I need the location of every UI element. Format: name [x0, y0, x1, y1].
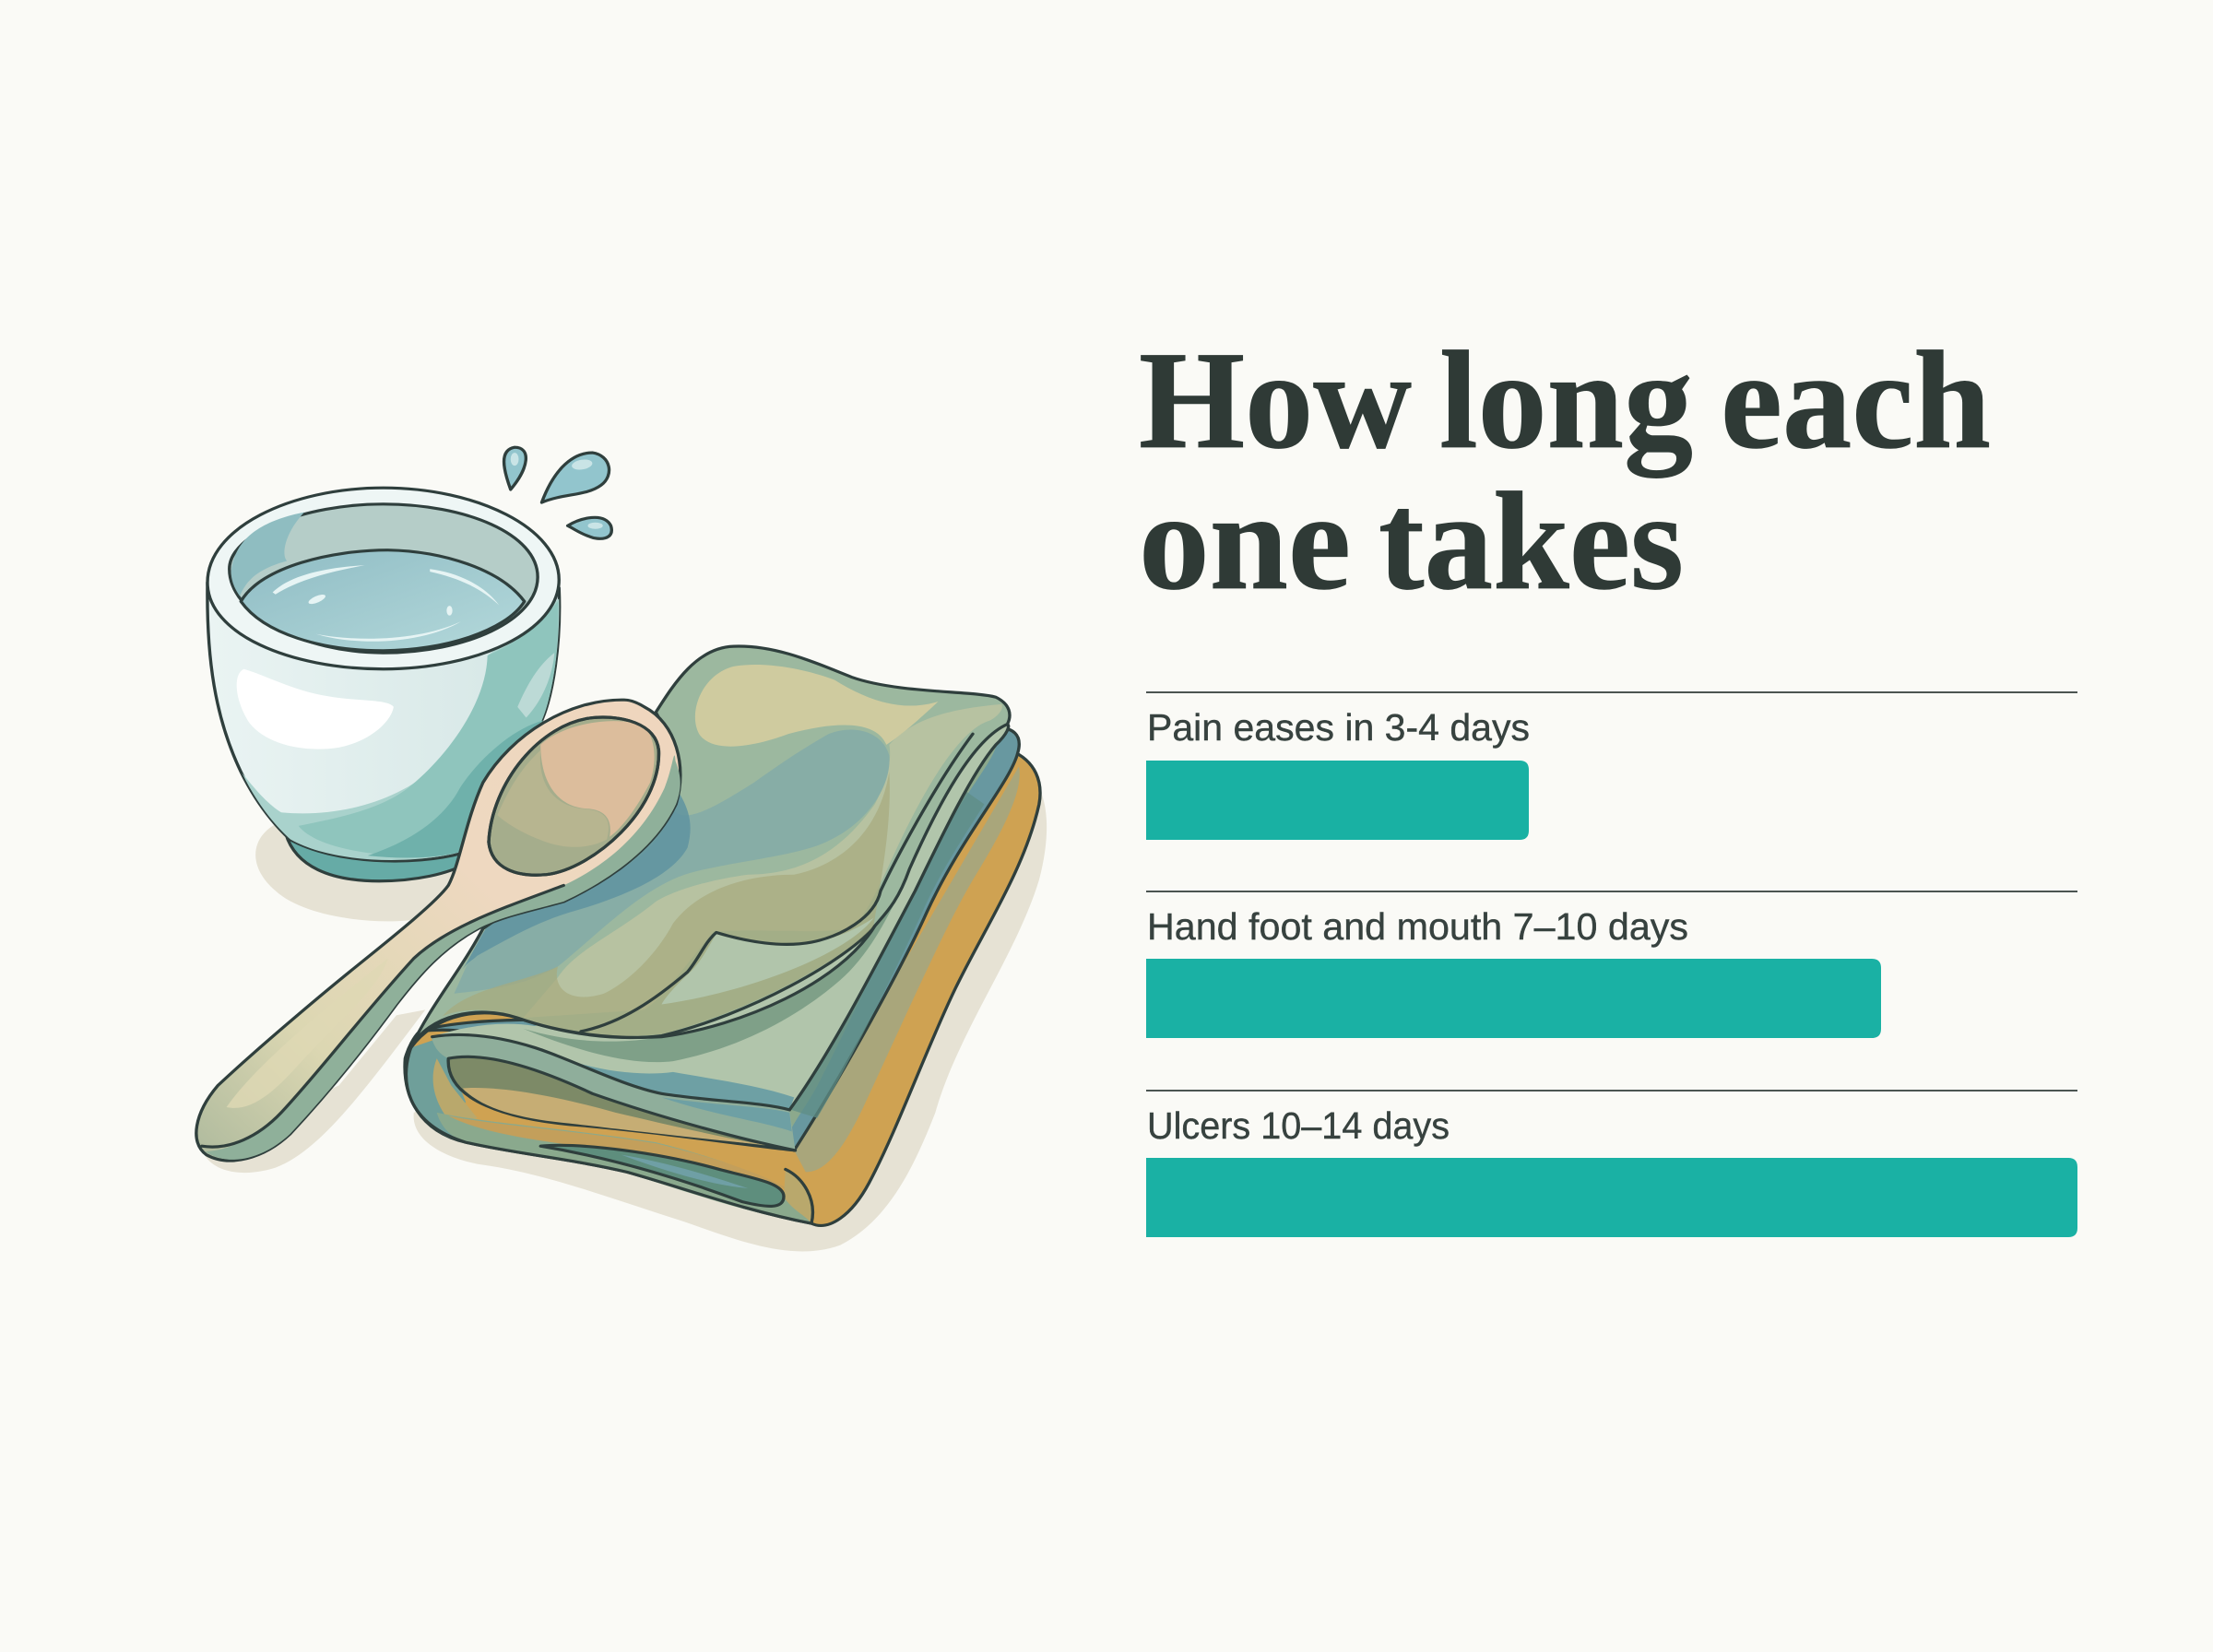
cloth colour washes [695, 665, 939, 747]
title: each [1721, 323, 1991, 478]
cloth bottom layer [405, 750, 1040, 1225]
bowl body [207, 583, 560, 861]
cloth lower roll [437, 1113, 811, 1223]
water surface [241, 550, 525, 651]
cloth fold lines [581, 734, 973, 1032]
icon: wooden spoon [196, 700, 680, 1161]
title: one [1139, 464, 1351, 619]
soft ground shadows [201, 788, 1047, 1251]
illustration: bowl of water, spoon and folded cloth [196, 447, 1047, 1251]
row: pain eases: Pain eases in 3-4 days [1147, 706, 1530, 749]
icon: water splash drops [504, 447, 611, 538]
icon: folded cloth [405, 646, 1040, 1225]
bowl shading [242, 598, 559, 860]
spoon edge lines [202, 885, 563, 1147]
title: long [1439, 323, 1693, 478]
cloth second band [432, 1034, 795, 1150]
spoon silhouette [196, 700, 680, 1161]
row: ulcers [1146, 1090, 2077, 1237]
icon: water bowl [207, 488, 560, 881]
title: takes [1379, 464, 1684, 619]
bowl foot [286, 794, 489, 881]
bar chart: recovery times [1146, 691, 2077, 1237]
cloth left roll band [407, 1037, 466, 1139]
cloth lower sheet [432, 725, 1009, 1110]
cloth slot [540, 1145, 784, 1206]
cloth pocket [448, 1056, 795, 1150]
spoon underside [205, 755, 680, 1160]
bowl interior [230, 504, 538, 653]
cloth top sheet [411, 646, 1010, 1047]
bowl rim [207, 488, 559, 669]
title [1139, 323, 1991, 619]
spoon bowl washes [540, 721, 655, 837]
water highlights [273, 565, 365, 595]
row: ulcers: Ulcers 10–14 days [1147, 1104, 1450, 1147]
row: pain eases [1146, 691, 2077, 840]
bowl highlight [237, 669, 394, 749]
row: hand foot and mouth [1146, 891, 2077, 1038]
title: How [1139, 323, 1412, 478]
cloth blue middle layer [420, 728, 1019, 1150]
spoon inner bowl [489, 717, 658, 875]
cloth roll outer line [406, 1047, 812, 1223]
cloth fold edge [789, 725, 1009, 1110]
row: hand foot and mouth: Hand foot and mouth 7–10 days [1147, 905, 1688, 948]
cloth flap [662, 918, 874, 1005]
